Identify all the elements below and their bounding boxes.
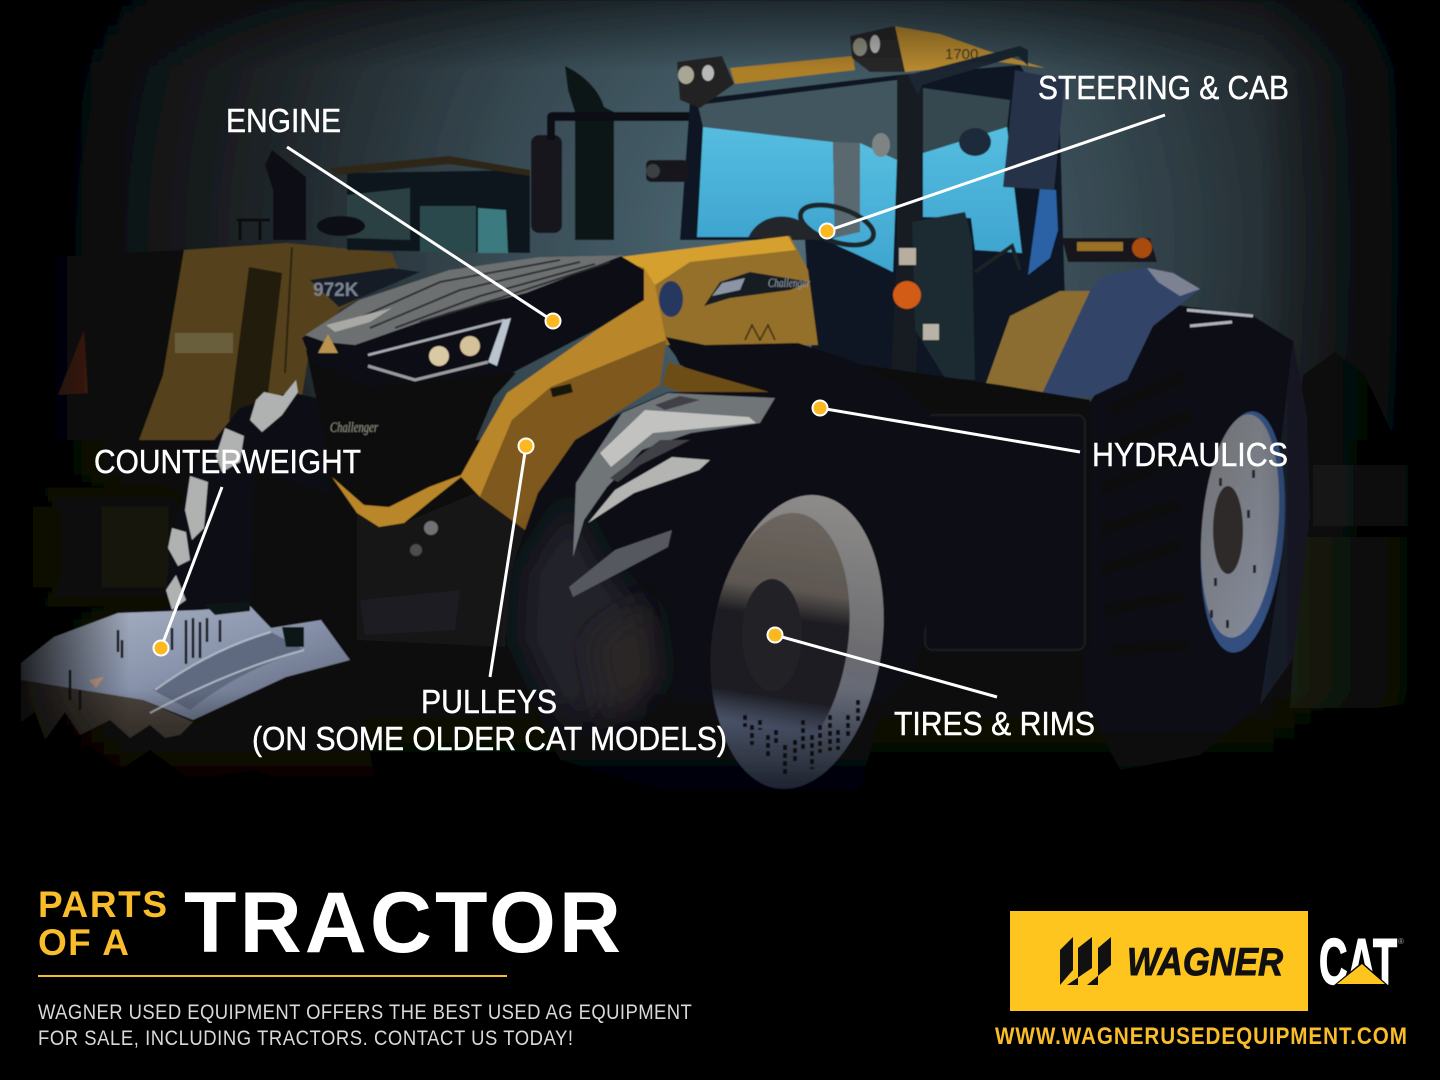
loader rear block [24, 250, 184, 440]
seat rail [975, 246, 1020, 272]
window extension [1028, 188, 1058, 275]
roof yellow strip [730, 56, 855, 84]
rear fender yellow [980, 291, 1090, 400]
panel slot [550, 383, 573, 397]
title rule [38, 975, 507, 977]
headlights [429, 336, 480, 366]
loader cab glass [347, 188, 410, 240]
icon: Wagner mark [1060, 937, 1111, 985]
weight ridge shadow [153, 632, 304, 710]
tire lower-left tone [520, 500, 640, 730]
front-left tire [166, 392, 335, 640]
cab [646, 26, 1157, 405]
loader air filter [317, 216, 365, 236]
loader cab body [347, 170, 530, 253]
ground [0, 440, 1440, 900]
title: TRACTOR [184, 875, 621, 971]
rear tire [1085, 305, 1310, 770]
loader cab glass right [420, 206, 476, 252]
rear rim ring [1192, 408, 1294, 656]
mirror arm [908, 46, 1028, 95]
rear marker [1062, 238, 1157, 262]
roof cap [893, 26, 1045, 72]
badge [659, 281, 683, 317]
hood black [302, 255, 644, 387]
loader cab roof [330, 156, 530, 176]
distant tree [1295, 352, 1395, 440]
orange lamp [893, 281, 921, 309]
square light top [899, 248, 916, 265]
right window [923, 127, 1022, 253]
title: OF A [38, 922, 129, 963]
top vignette [0, 0, 1440, 70]
lug shadow grooves [610, 396, 700, 482]
left field [0, 497, 178, 597]
rear tire shoulder [1260, 341, 1310, 705]
weight ridge highlights [150, 632, 304, 713]
headlight trim [368, 320, 505, 355]
square light lower [923, 324, 939, 340]
gold under fender [662, 362, 790, 398]
treeline shadow [1300, 440, 1440, 540]
centre pillar [890, 75, 922, 400]
fender mark [745, 325, 775, 340]
front fender [666, 337, 952, 640]
logo: CAT: ® [1398, 937, 1404, 946]
loader grille [229, 267, 282, 420]
background equipment on right [1313, 465, 1420, 526]
distant mud highlight [321, 850, 371, 862]
lug highlight lower [588, 457, 710, 523]
hood vents [305, 255, 624, 345]
title: PARTS [38, 884, 167, 925]
cab side ceiling [923, 88, 1010, 153]
left vignette [0, 0, 130, 900]
nose script: Challenger [330, 420, 378, 436]
tire mud patch [590, 600, 660, 730]
loader warning triangle [58, 330, 88, 395]
callout: pulleys: (ON SOME OLDER CAT MODELS) [252, 720, 727, 757]
weight splatter [70, 618, 220, 710]
lug highlight [600, 410, 756, 467]
steering wheel [796, 197, 878, 253]
callout: engine [226, 102, 560, 328]
side panel [925, 415, 1085, 650]
rear fender [980, 267, 1200, 400]
grey inner pillar [833, 142, 860, 240]
nose grille [306, 350, 516, 507]
loader seam [285, 247, 292, 373]
description: WAGNER USED EQUIPMENT OFFERS THE BEST USED AG EQUIPMENT [38, 1001, 692, 1024]
bright top stripe [612, 236, 796, 285]
cab work lamp [872, 133, 890, 157]
gold edge band [332, 268, 666, 527]
callout: hydraulics: HYDRAULICS [1092, 436, 1288, 473]
logo: Wagner [1010, 911, 1308, 1011]
main lug [573, 393, 775, 557]
side script: Challenger [768, 275, 811, 290]
side work light [646, 160, 688, 182]
inner mirror [959, 128, 991, 156]
bottom mud streaks [0, 700, 1440, 900]
loader model badge: 972K [313, 280, 359, 301]
rear hub hole [1213, 486, 1243, 574]
lower lug [569, 530, 672, 597]
grass on right [1290, 537, 1440, 708]
weight front [21, 660, 380, 866]
loader decal [175, 333, 233, 353]
front tire [505, 392, 929, 810]
hub [742, 579, 802, 691]
exhaust stack [565, 66, 614, 240]
rim splatter [745, 700, 858, 775]
left window [697, 127, 835, 237]
dark body behind fender [660, 335, 1090, 660]
Wagner wordmark: WAGNER [1127, 941, 1283, 984]
rim dish [695, 504, 865, 776]
loader yellow body [139, 243, 400, 440]
bottom fade [0, 690, 1440, 880]
weight chip [89, 677, 104, 688]
rear tire tread [1100, 375, 1190, 650]
stack bracket [547, 112, 690, 140]
upper body gold [620, 236, 818, 345]
description: FOR SALE, INCLUDING TRACTORS. CONTACT US TODAY! [38, 1027, 573, 1050]
description [38, 1001, 692, 1050]
front axle frame [250, 470, 368, 640]
lower headlight trim [368, 362, 488, 380]
rear rim bolts [1210, 470, 1256, 628]
side vent [704, 272, 810, 306]
rim ring [694, 484, 902, 800]
solid footer [0, 870, 1440, 1080]
air intake [531, 135, 562, 233]
callout: steering and cab [820, 69, 1289, 238]
weight mounting plate [204, 602, 250, 615]
callout: counterweight [94, 443, 361, 656]
nose underside [357, 493, 529, 647]
hood highlight [326, 308, 392, 332]
rear fender highlight [1147, 268, 1200, 296]
front-left tire lugs [166, 380, 298, 610]
sky [0, 0, 1440, 560]
callout: tires and rims [768, 628, 1095, 742]
right vignette [1260, 0, 1440, 900]
gold lower panel [480, 340, 666, 533]
callout: pulleys: PULLEYS [421, 683, 557, 720]
callout: tires and rims: TIRES & RIMS [894, 705, 1095, 742]
loader model badge [310, 268, 420, 307]
hood vent lines [350, 260, 610, 328]
mirror [1003, 70, 1065, 190]
loader rail [237, 220, 270, 240]
weight top [21, 606, 350, 720]
callout: hydraulics [812, 400, 1288, 473]
left roof lights [677, 56, 734, 108]
weight drips [21, 680, 193, 740]
callout: engine: ENGINE [226, 102, 341, 139]
headlight chrome [488, 318, 511, 366]
callout: pulleys [252, 438, 727, 757]
roof number: 1700 [945, 46, 978, 63]
underside lamps [360, 521, 460, 635]
cab ceiling [698, 80, 897, 160]
tire body [505, 392, 929, 810]
counterweight [21, 602, 380, 866]
cab shell [680, 65, 1065, 405]
dash hump [748, 216, 820, 240]
callout: steering and cab: STEERING & CAB [1038, 69, 1289, 106]
rear fender blue [1040, 267, 1200, 398]
weight bracket [282, 627, 304, 647]
upper roof lights [850, 26, 905, 72]
background loader [24, 150, 530, 440]
middle window [825, 143, 897, 272]
rear tire highlight [1187, 310, 1253, 326]
hood emblem [318, 334, 338, 353]
loader exhaust [265, 150, 306, 240]
rear rim [1192, 411, 1288, 641]
vent highlight [712, 278, 745, 296]
callout: counterweight: COUNTERWEIGHT [94, 443, 361, 480]
handrail console [912, 212, 975, 380]
hood and body [302, 236, 818, 647]
website: WWW.WAGNERUSEDEQUIPMENT.COM [995, 1023, 1407, 1049]
loader door glass [478, 208, 508, 253]
